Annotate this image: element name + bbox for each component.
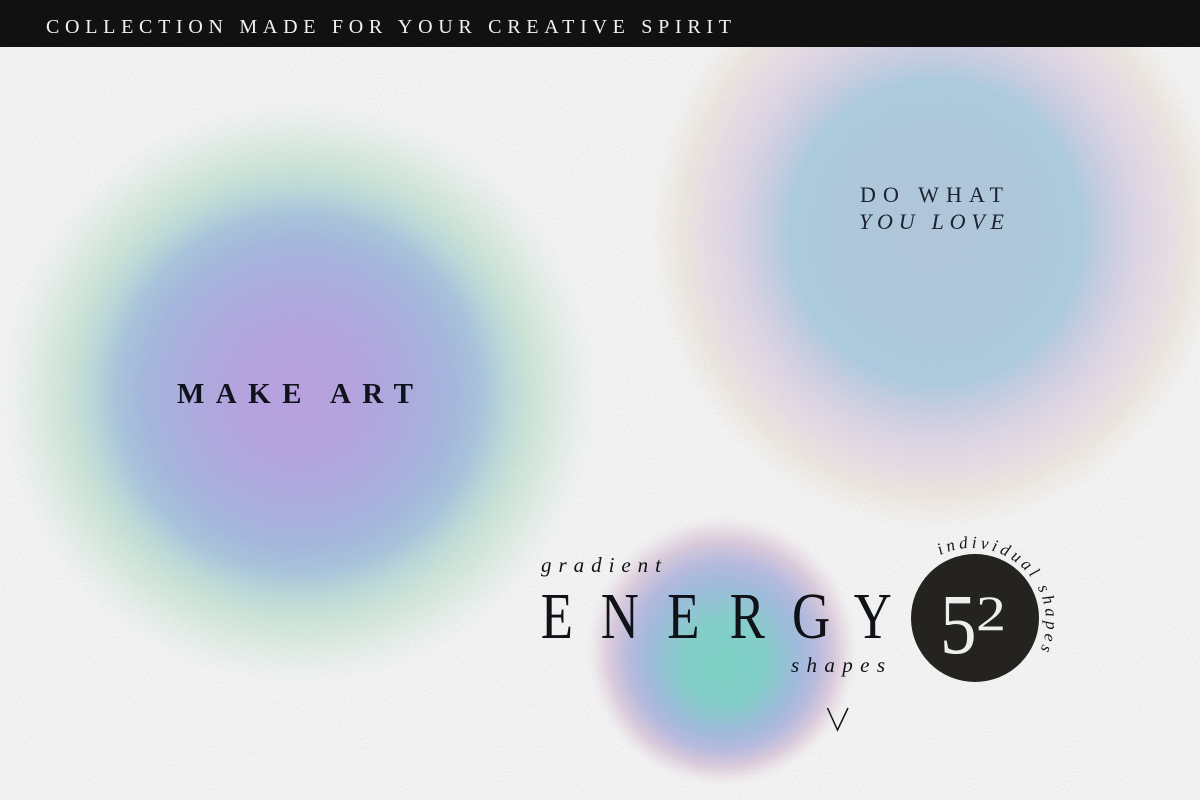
gradient blob: energy <box>584 512 860 788</box>
badge: 52 individual shapes <box>911 536 1054 682</box>
label: gradient: gradient <box>541 553 662 577</box>
text: make art: MAKE ART <box>177 378 413 410</box>
badge circle <box>911 554 1039 682</box>
curved caption: individual shapes <box>938 536 1054 652</box>
title: gradient energy shapes <box>541 553 892 677</box>
text: do what you love: DO WHAT <box>860 182 1004 207</box>
arrow: down chevron <box>828 708 848 730</box>
top banner: COLLECTION MADE FOR YOUR CREATIVE SPIRIT <box>46 16 731 38</box>
top banner <box>0 0 1200 47</box>
text: do what you love: YOU LOVE <box>859 209 1005 234</box>
number 52: 2 <box>976 586 1006 641</box>
gradient blob: make art <box>0 93 605 693</box>
label: shapes: shapes <box>791 653 885 677</box>
number 52: 5 <box>940 578 977 672</box>
number 52 <box>940 578 1006 672</box>
heading: energy: ENERGY <box>541 579 892 652</box>
text: do what you love <box>859 182 1005 234</box>
gradient blob: do what you love <box>646 0 1200 534</box>
